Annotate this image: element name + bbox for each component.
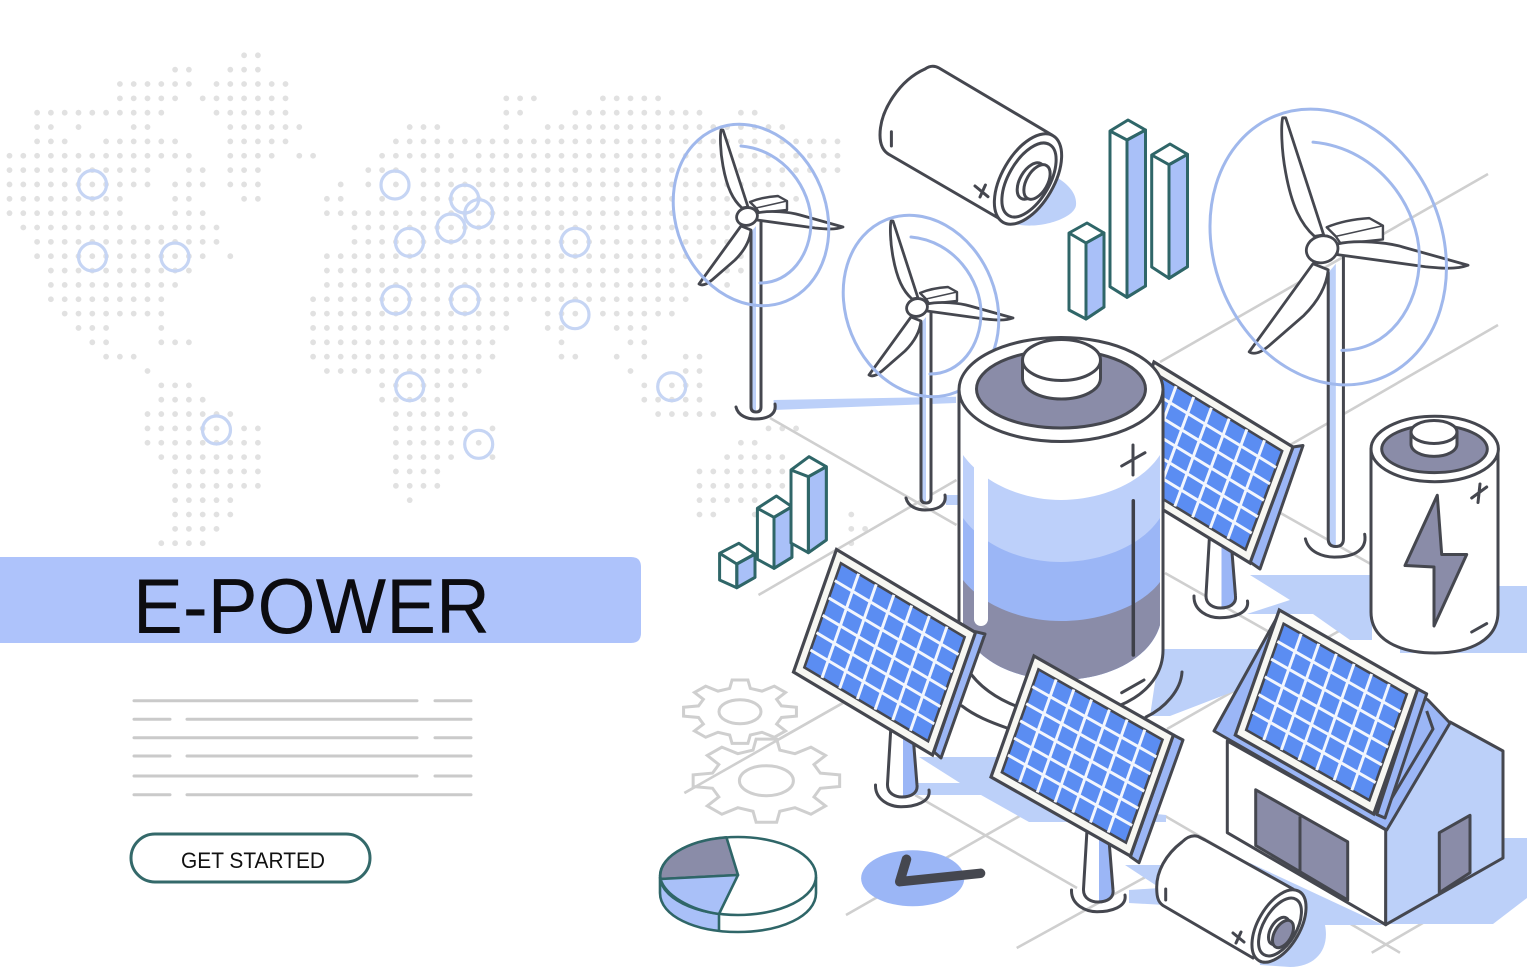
wind turbine: left [647,101,855,419]
wind turbine: right large [1170,73,1487,557]
title banner [0,557,641,650]
placeholder text block [134,701,471,795]
solar panel: front left [794,550,985,807]
wind turbine: middle [817,192,1025,510]
central large battery [959,338,1182,728]
button: get started [131,834,370,882]
battery: lightning [1371,416,1498,653]
battery: top lying [880,66,1076,235]
floor grid lines [684,174,1503,953]
gears [684,680,843,822]
icon: checkmark on ellipse [861,850,981,906]
bar chart: left [720,457,826,588]
heading: E-POWER: E-POWER [133,562,490,650]
battery: bottom lying [1157,836,1317,971]
pie chart [660,837,816,932]
ground shadows [774,397,1527,967]
button: get started: GET STARTED [181,848,325,873]
dotted world map [10,55,865,543]
bar chart: top right [1069,120,1188,319]
map location rings [78,170,686,458]
solar panel: front right [991,656,1183,912]
icon: lightning bolt [1405,495,1467,626]
solar panel: back [1111,362,1303,618]
house with solar roof [1214,610,1503,925]
